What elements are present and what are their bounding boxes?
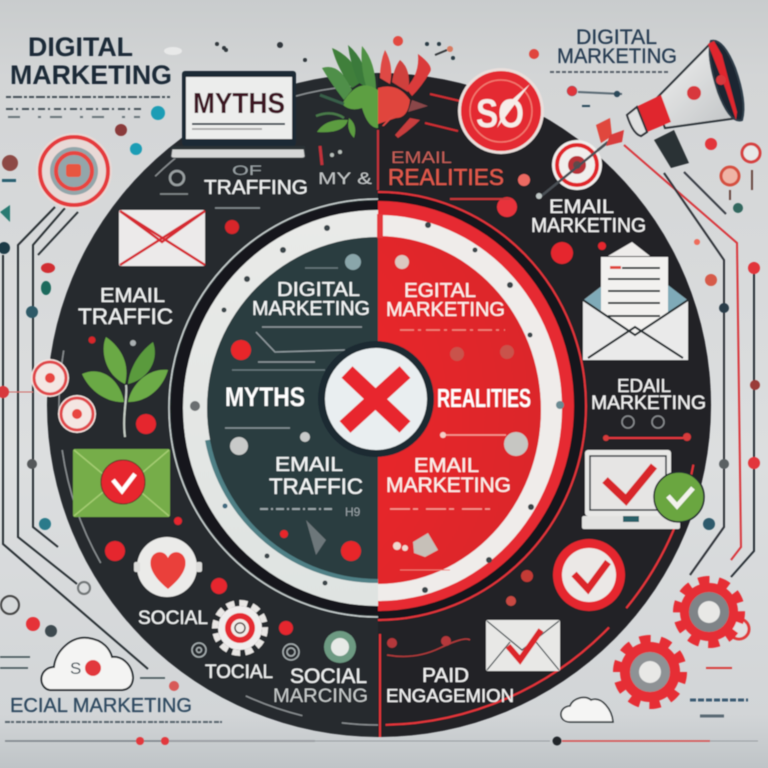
icon: gear white — [215, 603, 265, 653]
icon: gear lower — [617, 639, 683, 705]
inner labels left: MARKETING — [252, 298, 370, 320]
icon: red check circle — [553, 539, 625, 611]
icon: cloud left: S — [70, 659, 81, 678]
outer labels left: EMAIL — [100, 285, 165, 307]
outer labels left: OF — [232, 162, 262, 178]
outer labels right: EDAIL — [617, 376, 671, 396]
lower left caption — [0, 657, 222, 722]
outer labels right: MARKETING — [591, 393, 706, 414]
bottom timeline — [5, 736, 758, 746]
icon: envelope check — [486, 620, 560, 671]
outer labels right: REALITIES — [388, 164, 504, 190]
icon: email crossed — [119, 210, 205, 266]
outer labels left — [78, 162, 373, 707]
inner labels right — [386, 280, 511, 497]
center seam — [377, 214, 383, 238]
inner labels right: EGITAL — [404, 280, 476, 302]
outer labels left: TRAFFING — [204, 177, 308, 199]
outer labels left: SOCIAL — [138, 608, 208, 629]
ring scatter dots — [88, 171, 688, 656]
right circuit nodes — [690, 138, 760, 716]
inner labels left: TRAFFIC — [269, 474, 363, 499]
icon: gear upper — [677, 580, 741, 644]
inner labels left: DIGITAL — [277, 279, 360, 301]
outer labels right — [386, 148, 706, 706]
scribble under marketing — [603, 416, 691, 441]
icon: megaphone — [627, 41, 743, 168]
outer labels left: MY & — [318, 169, 373, 188]
title: digital marketing left — [10, 32, 172, 90]
left panel details — [225, 254, 362, 561]
title: digital marketing right: DIGITAL — [576, 26, 657, 49]
icon: green dot — [324, 631, 356, 663]
right panel details — [390, 255, 528, 570]
icon: target left — [36, 133, 112, 209]
icon: small swirl — [192, 643, 299, 660]
left panel details: H9 — [345, 505, 361, 519]
icon: cloud left — [41, 638, 133, 690]
icon: leaves — [82, 337, 168, 437]
icon: laptop check — [582, 450, 704, 529]
outer labels right: PAID — [422, 665, 469, 687]
outer labels left: TOCIAL — [205, 662, 273, 683]
center headings: MYTHS — [225, 382, 305, 412]
title: digital marketing left: DIGITAL — [28, 32, 133, 62]
lower left caption: ECIAL MARKETING — [10, 695, 192, 717]
right circuit lines — [624, 145, 754, 577]
inner labels right: MARKETING — [386, 474, 511, 497]
outer labels left: SOCIAL — [290, 665, 367, 688]
outer labels right: MARKETING — [531, 215, 646, 237]
center headings: REALITIES — [437, 383, 531, 413]
icon: cloud right — [561, 698, 613, 722]
outer labels left: MARCING — [273, 686, 368, 707]
icon: so badge: SO — [476, 92, 524, 136]
icon: laptop myths: MYTHS — [193, 88, 285, 120]
outer labels right: EMAIL — [391, 148, 452, 167]
icon: red plant — [378, 36, 510, 199]
small scribbled subtitle left — [6, 97, 170, 117]
title: digital marketing left: MARKETING — [10, 60, 172, 90]
icon: small targets — [31, 359, 96, 433]
left circuit lines — [3, 207, 148, 669]
outer labels right: EMAIL — [549, 197, 614, 218]
main dark circle — [47, 73, 711, 737]
icon: laptop myths — [171, 71, 305, 158]
icon: open envelope with letter — [583, 242, 688, 360]
outer labels right: ENGAGEMION — [386, 686, 514, 706]
outer labels left: TRAFFIC — [78, 304, 173, 329]
left circuit nodes — [0, 42, 307, 637]
icon: green envelope — [73, 449, 170, 517]
inner labels right: EMAIL — [414, 455, 479, 477]
title: digital marketing right: MARKETING — [557, 45, 677, 68]
center badge — [318, 341, 434, 457]
icon: so badge — [458, 68, 544, 154]
inner labels left: EMAIL — [275, 454, 343, 476]
inner labels right: MARKETING — [386, 299, 505, 321]
title: digital marketing right — [529, 26, 677, 106]
icon: green plant — [316, 45, 378, 165]
icon: heart — [134, 537, 202, 597]
icon: target with dart — [536, 118, 624, 199]
central ring — [169, 192, 587, 620]
center headings — [225, 382, 531, 413]
inner labels left — [252, 279, 370, 499]
